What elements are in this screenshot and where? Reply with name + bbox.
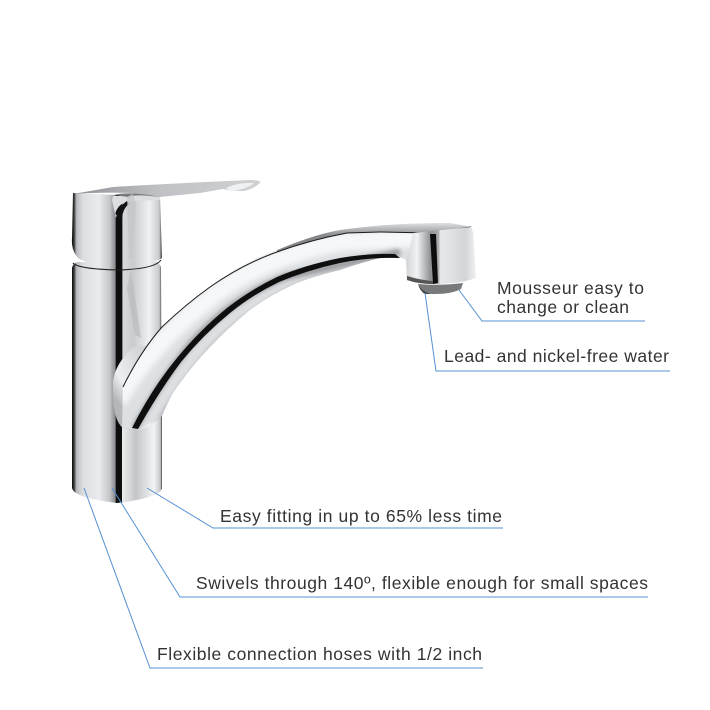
lever tip highlight xyxy=(226,183,254,191)
tip dark strip xyxy=(430,234,438,284)
body reflection xyxy=(127,270,141,338)
collar seam xyxy=(73,260,161,270)
callout: connection hoses xyxy=(84,488,483,668)
callout: lead- and nickel-free: Lead- and nickel-free water xyxy=(444,346,669,366)
tip bottom shade xyxy=(407,276,433,284)
aerator xyxy=(418,283,463,294)
head white cover over strip top xyxy=(112,196,160,218)
callout: easy fitting: Easy fitting in up to 65% less time xyxy=(220,506,502,526)
spout top edge line xyxy=(123,227,471,387)
callout: swivels: Swivels through 140º, flexible enough for small spaces xyxy=(196,573,648,593)
spout xyxy=(122,223,472,430)
callout: mousseur: change or clean xyxy=(497,297,629,317)
lever underside shadow xyxy=(114,193,160,197)
faucet body xyxy=(72,262,162,503)
spout top face xyxy=(277,223,472,252)
faucet head xyxy=(72,193,162,266)
callout: connection hoses: Flexible connection hoses with 1/2 inch xyxy=(157,644,482,664)
callout: mousseur xyxy=(459,278,645,321)
faucet xyxy=(72,180,500,503)
callout: mousseur: Mousseur easy to xyxy=(497,278,644,298)
head reflection xyxy=(127,194,136,258)
lower body section xyxy=(122,414,162,502)
lever handle xyxy=(73,180,260,197)
spout dark reflection xyxy=(132,254,400,429)
spout tip xyxy=(406,227,476,284)
callout: swivels xyxy=(112,488,648,597)
spout base shading xyxy=(122,223,472,430)
callout: lead- and nickel-free xyxy=(425,293,670,371)
callout: easy fitting xyxy=(147,488,503,528)
spout elbow xyxy=(113,346,150,430)
